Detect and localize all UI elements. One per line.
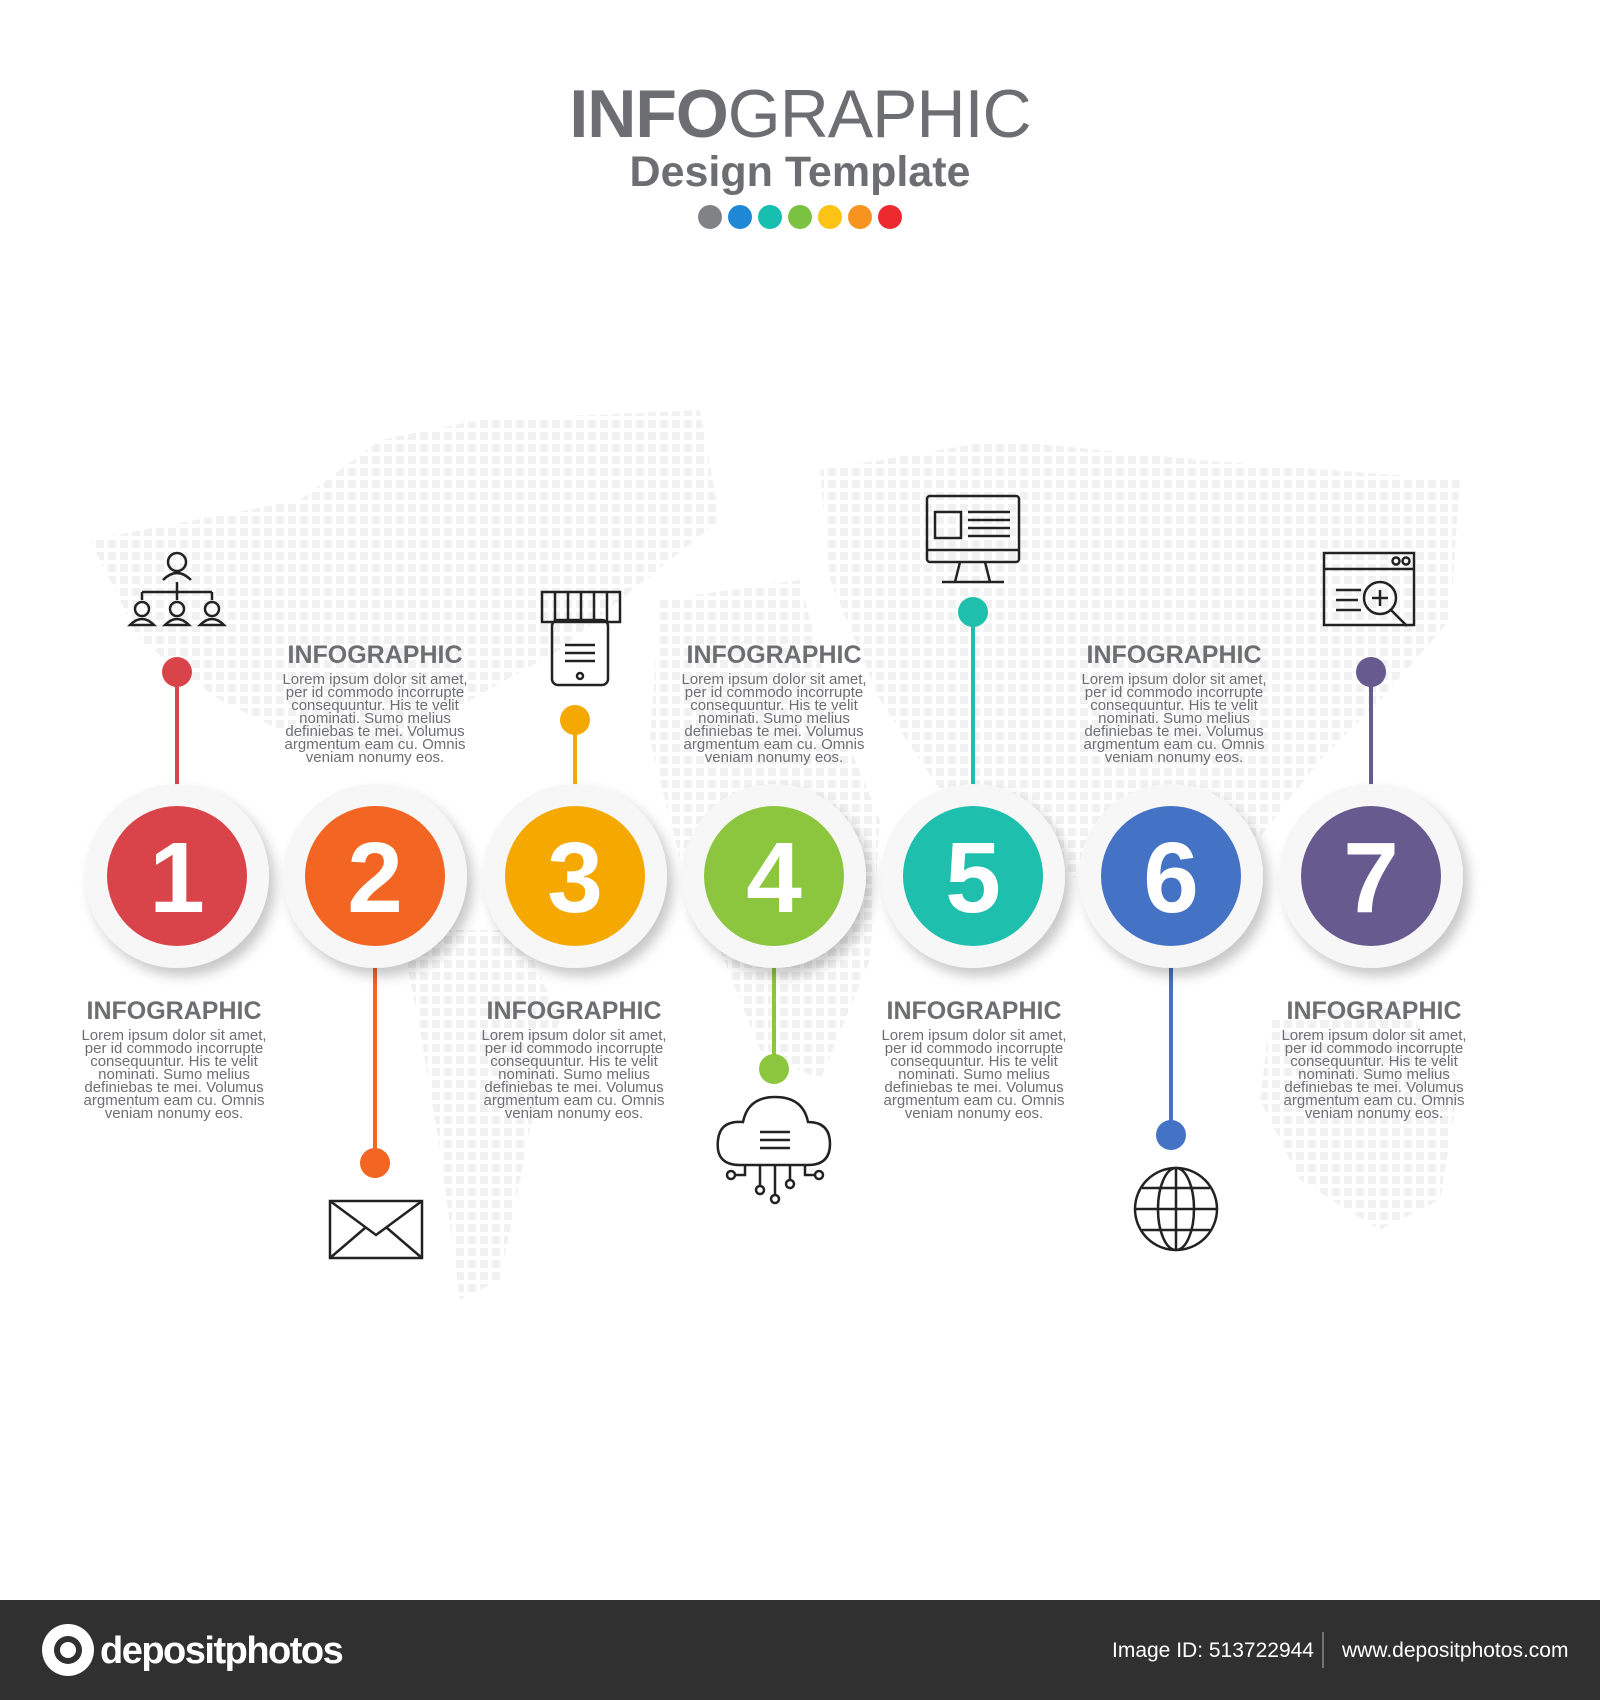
text blocks: INFOGRAPHIC (886, 997, 1062, 1025)
text blocks: veniam nonumy eos. (505, 1105, 643, 1122)
text blocks: veniam nonumy eos. (1105, 749, 1243, 766)
text blocks: definiebas te mei. Volumus (84, 1079, 264, 1096)
text blocks: Lorem ipsum dolor sit amet, (481, 1027, 667, 1044)
icons (130, 496, 1414, 1258)
color dots (698, 205, 902, 229)
text blocks: nominati. Sumo melius (698, 710, 850, 727)
text blocks: definiebas te mei. Volumus (1084, 723, 1264, 740)
icon: globe (1135, 1168, 1217, 1250)
text blocks: Lorem ipsum dolor sit amet, (1281, 1027, 1467, 1044)
text blocks: per id commodo incorrupte (685, 684, 863, 701)
circles 1-7: 7 (1343, 822, 1399, 934)
icon: envelope (330, 1201, 422, 1258)
text blocks: argmentum eam cu. Omnis (684, 736, 864, 753)
text blocks: INFOGRAPHIC (486, 997, 662, 1025)
text blocks: INFOGRAPHIC (1286, 997, 1462, 1025)
icon: cloud (718, 1097, 830, 1203)
text blocks: veniam nonumy eos. (905, 1105, 1043, 1122)
text blocks: nominati. Sumo melius (498, 1066, 650, 1083)
text blocks: argmentum eam cu. Omnis (1084, 736, 1264, 753)
text blocks: consequuntur. His te velit (1090, 697, 1259, 714)
text blocks: consequuntur. His te velit (690, 697, 859, 714)
footer: www.depositphotos.com (1341, 1639, 1568, 1662)
stems (162, 597, 1386, 1178)
text blocks: argmentum eam cu. Omnis (1284, 1092, 1464, 1109)
circles 1-7: 2 (347, 822, 403, 934)
footer: depositphotos (100, 1630, 343, 1672)
text blocks: per id commodo incorrupte (485, 1040, 663, 1057)
text blocks: INFOGRAPHIC (86, 997, 262, 1025)
footer (0, 1600, 1600, 1700)
text blocks: Lorem ipsum dolor sit amet, (81, 1027, 267, 1044)
text blocks: per id commodo incorrupte (85, 1040, 263, 1057)
text blocks: nominati. Sumo melius (98, 1066, 250, 1083)
text blocks: INFOGRAPHIC (1086, 641, 1262, 669)
text blocks: nominati. Sumo melius (1098, 710, 1250, 727)
text blocks: veniam nonumy eos. (306, 749, 444, 766)
text blocks: Lorem ipsum dolor sit amet, (881, 1027, 1067, 1044)
text blocks: argmentum eam cu. Omnis (884, 1092, 1064, 1109)
text blocks: argmentum eam cu. Omnis (285, 736, 465, 753)
text blocks: per id commodo incorrupte (1085, 684, 1263, 701)
circles 1-7: 6 (1143, 822, 1199, 934)
text blocks: veniam nonumy eos. (1305, 1105, 1443, 1122)
text blocks: nominati. Sumo melius (898, 1066, 1050, 1083)
text blocks: Lorem ipsum dolor sit amet, (681, 671, 867, 688)
text blocks: consequuntur. His te velit (890, 1053, 1059, 1070)
text blocks: nominati. Sumo melius (299, 710, 451, 727)
circles 1-7: 1 (149, 822, 205, 934)
text blocks: nominati. Sumo melius (1298, 1066, 1450, 1083)
circles 1-7: 5 (945, 822, 1001, 934)
text blocks: argmentum eam cu. Omnis (84, 1092, 264, 1109)
text blocks: per id commodo incorrupte (286, 684, 464, 701)
text blocks: veniam nonumy eos. (705, 749, 843, 766)
text blocks: definiebas te mei. Volumus (1284, 1079, 1464, 1096)
text blocks: consequuntur. His te velit (490, 1053, 659, 1070)
icon: web search (1324, 553, 1414, 626)
text blocks: definiebas te mei. Volumus (484, 1079, 664, 1096)
text blocks: consequuntur. His te velit (1290, 1053, 1459, 1070)
icon: hierarchy (130, 553, 224, 625)
text blocks: consequuntur. His te velit (90, 1053, 259, 1070)
text blocks: per id commodo incorrupte (885, 1040, 1063, 1057)
footer: Image ID: 513722944 (1112, 1639, 1314, 1662)
title: INFOGRAPHIC (569, 76, 1031, 152)
text blocks (81, 641, 1467, 1122)
text blocks: consequuntur. His te velit (291, 697, 460, 714)
text blocks: Lorem ipsum dolor sit amet, (282, 671, 468, 688)
circles 1-7 (85, 784, 1463, 968)
icon: shop mobile (542, 592, 620, 685)
text blocks: INFOGRAPHIC (288, 641, 462, 669)
text blocks: Lorem ipsum dolor sit amet, (1081, 671, 1267, 688)
text blocks: definiebas te mei. Volumus (684, 723, 864, 740)
circles 1-7: 3 (547, 822, 603, 934)
circles 1-7: 4 (746, 822, 802, 934)
text blocks: per id commodo incorrupte (1285, 1040, 1463, 1057)
title (569, 76, 1031, 196)
text blocks: definiebas te mei. Volumus (285, 723, 465, 740)
text blocks: INFOGRAPHIC (686, 641, 862, 669)
text blocks: definiebas te mei. Volumus (884, 1079, 1064, 1096)
title: Design Template (630, 148, 970, 196)
icon: monitor (927, 496, 1019, 582)
text blocks: argmentum eam cu. Omnis (484, 1092, 664, 1109)
text blocks: veniam nonumy eos. (105, 1105, 243, 1122)
world map background (90, 410, 1460, 1300)
